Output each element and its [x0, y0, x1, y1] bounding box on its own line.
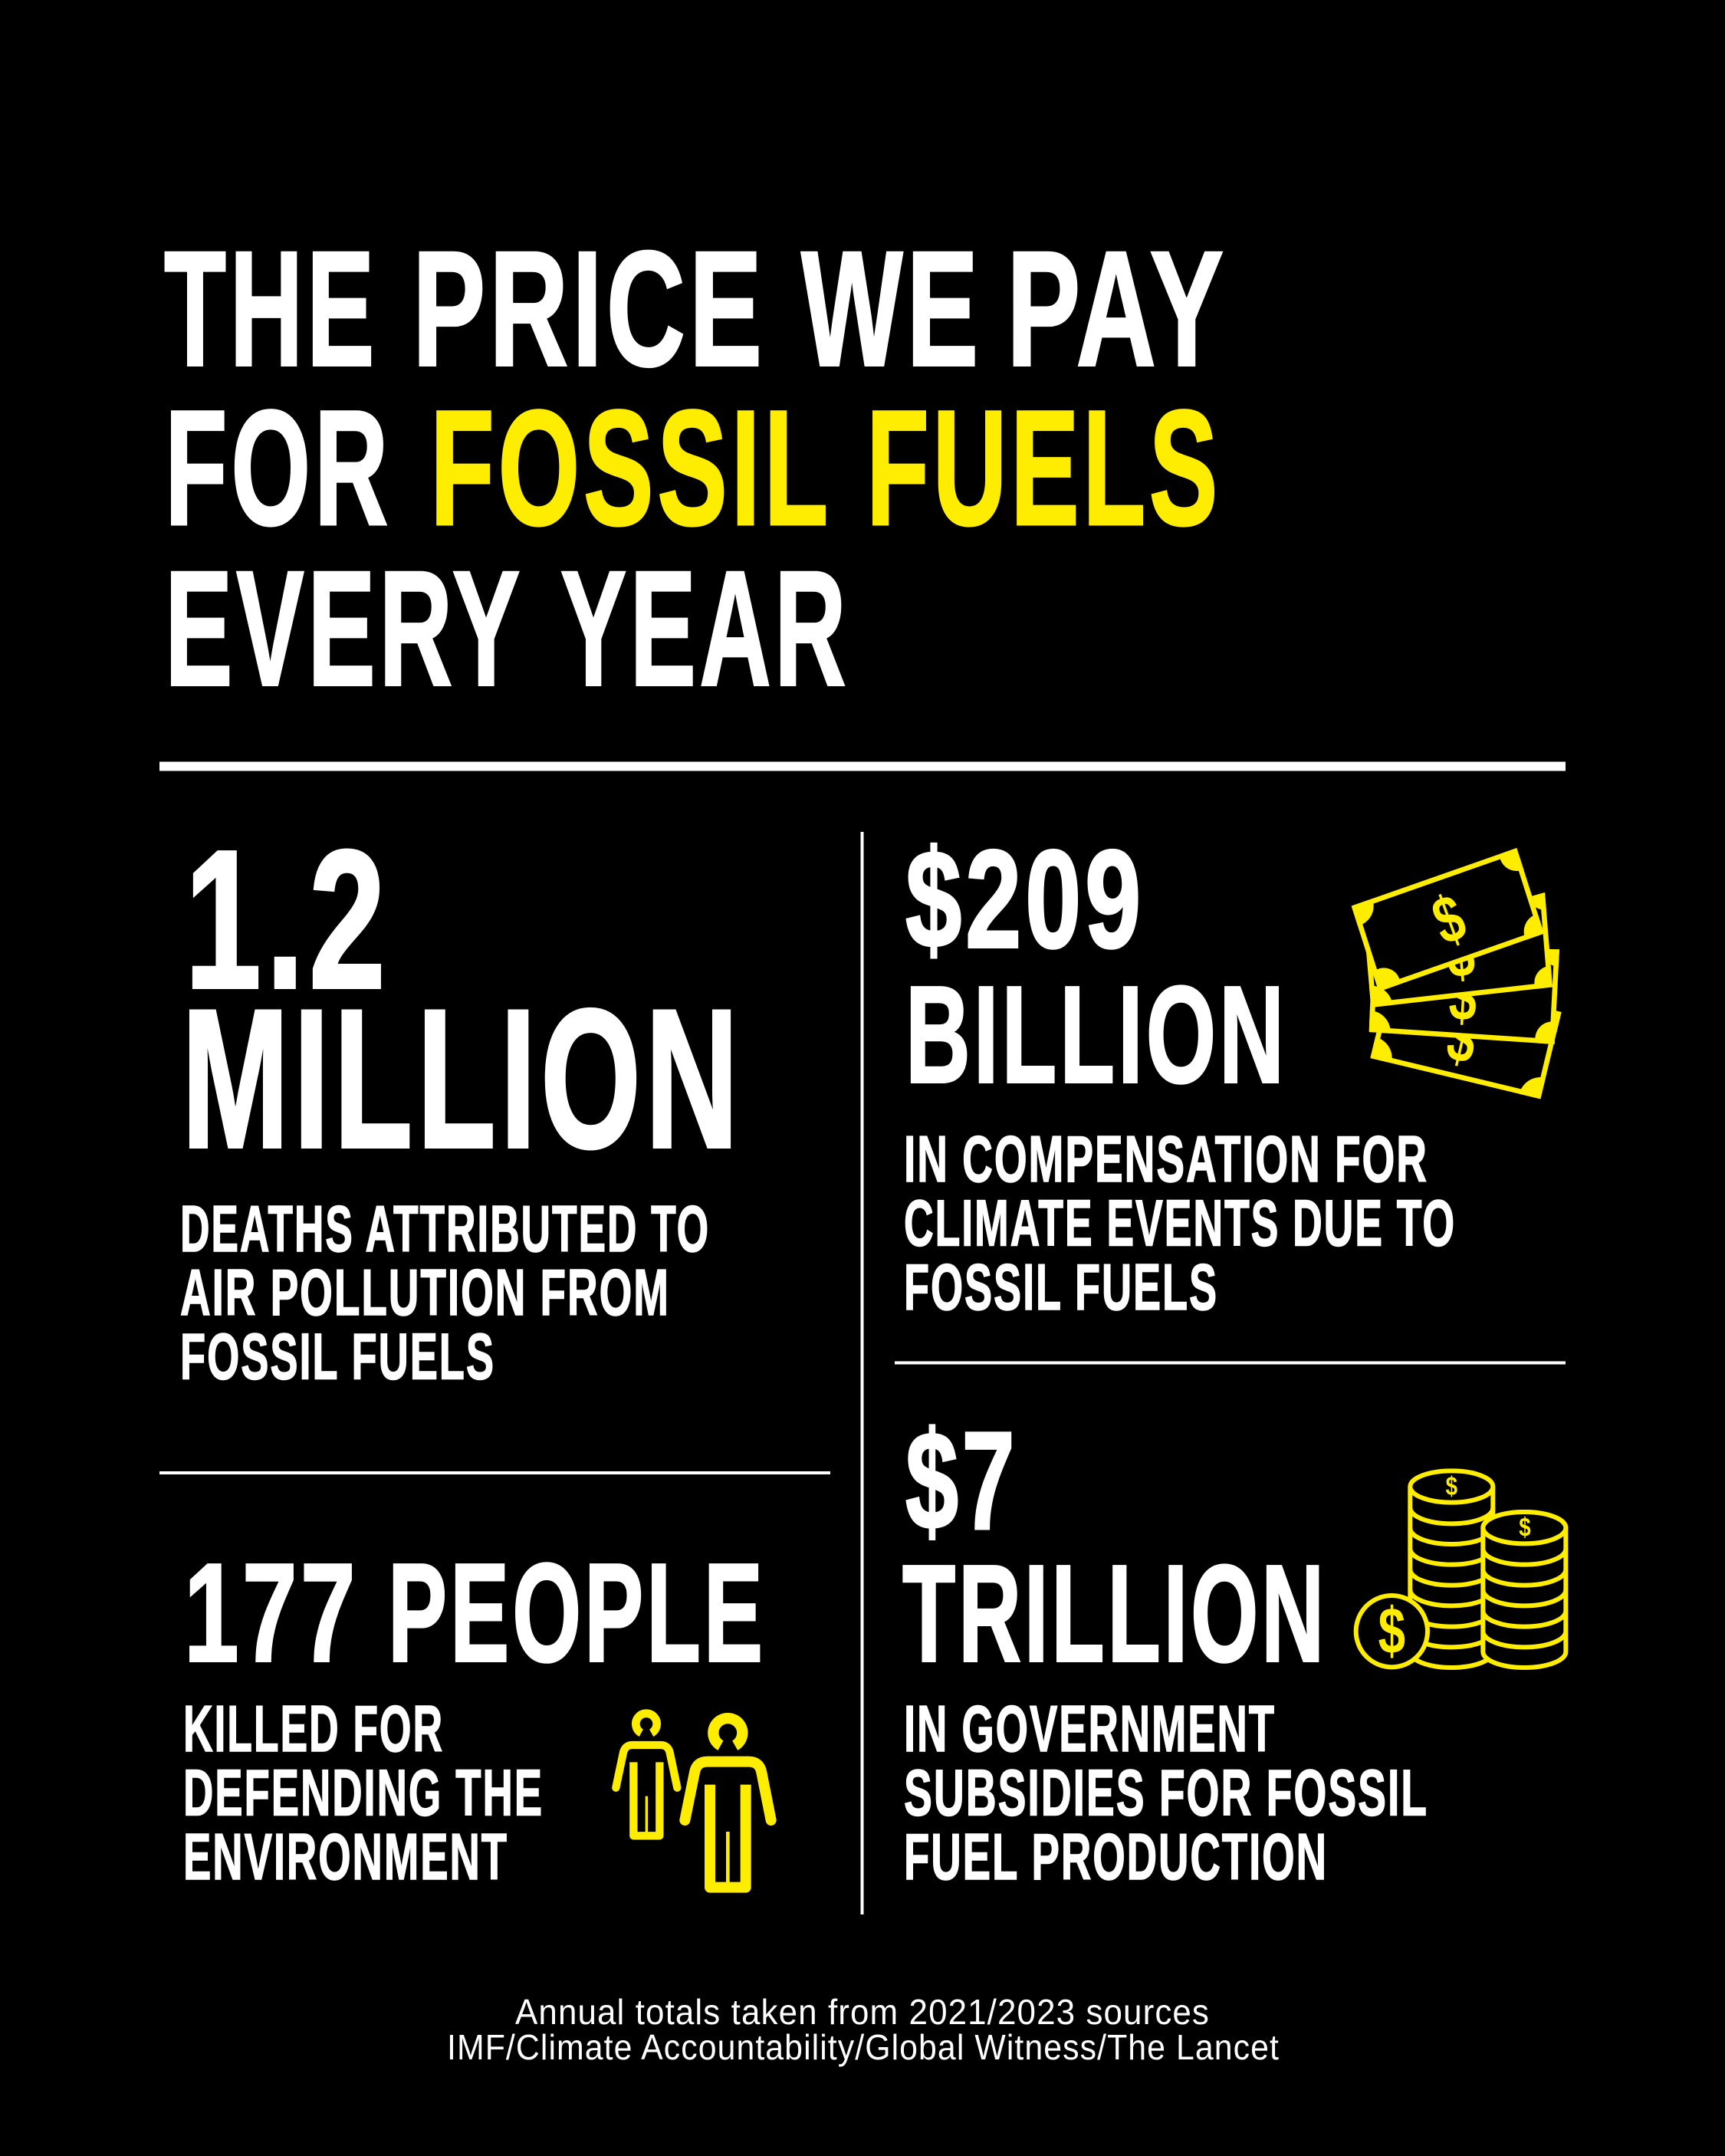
text: killed description: ENVIRONMENT — [183, 1821, 508, 1894]
text: subsidies description — [904, 1693, 1428, 1894]
icon: coin stacks: $ — [1446, 1471, 1457, 1501]
icon: banknotes: $ — [1441, 1001, 1484, 1079]
stat: 177 people — [184, 1533, 766, 1691]
text: compensation description: IN COMPENSATION FOR — [904, 1123, 1428, 1196]
panel: government subsidies — [902, 1402, 1566, 1894]
text: deaths description: DEATHS ATTRIBUTED TO — [180, 1193, 710, 1266]
text: subsidies description: IN GOVERNMENT — [904, 1693, 1276, 1766]
title: PAY — [1007, 218, 1227, 400]
stat: $209 billion: BILLION — [905, 958, 1287, 1112]
icon: coin stacks: $ — [1519, 1513, 1531, 1542]
text: deaths description — [180, 1193, 710, 1394]
stat: $209 billion: $209 — [905, 820, 1145, 977]
icon: coin stacks: $ — [1378, 1594, 1405, 1667]
title: FUELS — [866, 376, 1221, 560]
icon: coin stacks — [1356, 1471, 1566, 1668]
icon: banknotes — [1351, 848, 1562, 1099]
footer: sources — [447, 1992, 1280, 2067]
icon: banknotes: $ — [1444, 916, 1477, 992]
footer: sources: IMF/Climate Accountability/Global Witness/The Lancet — [447, 2027, 1280, 2067]
title: PRICE — [412, 218, 766, 400]
title: YEAR — [560, 537, 849, 721]
stat: 1.2 million: 1.2 — [185, 810, 390, 1030]
stat: 1.2 million: MILLION — [182, 968, 743, 1189]
title — [164, 218, 1227, 721]
footer: sources: Annual totals taken from 2021/2023 sources — [515, 1992, 1210, 2032]
text: deaths description: AIR POLLUTION FROM — [180, 1257, 670, 1329]
text: subsidies description: FUEL PRODUCTION — [904, 1821, 1328, 1894]
title: FOSSIL — [430, 376, 832, 560]
text: killed description: KILLED FOR — [183, 1693, 444, 1766]
stat: 1.2 million — [182, 810, 743, 1189]
stat: $7 trillion: $7 — [905, 1402, 1018, 1559]
panel: people killed — [183, 1533, 771, 1894]
icon: banknotes: $ — [1447, 961, 1479, 1035]
text: compensation description — [904, 1123, 1456, 1324]
stat: $209 billion — [905, 820, 1287, 1112]
text: killed description — [183, 1693, 544, 1894]
stat: $7 trillion: TRILLION — [902, 1536, 1327, 1691]
text: deaths description: FOSSIL FUELS — [180, 1320, 495, 1394]
panel: climate compensation — [904, 820, 1583, 1324]
text: killed description: DEFENDING THE — [183, 1757, 544, 1829]
stat: $7 trillion — [902, 1402, 1327, 1691]
stat: 177 people: 177 — [184, 1533, 359, 1691]
text: compensation description: FOSSIL FUELS — [904, 1251, 1218, 1324]
text: subsidies description: SUBSIDIES FOR FOSSIL — [904, 1757, 1428, 1829]
icon: banknotes: $ — [1424, 880, 1474, 959]
title: FOR — [165, 376, 392, 560]
icon: two people — [616, 1714, 771, 1888]
title: EVERY — [165, 537, 524, 721]
stat: 177 people: PEOPLE — [388, 1533, 766, 1691]
title: WE — [801, 218, 982, 400]
panel: air pollution deaths — [180, 810, 743, 1394]
title: THE — [164, 218, 378, 400]
